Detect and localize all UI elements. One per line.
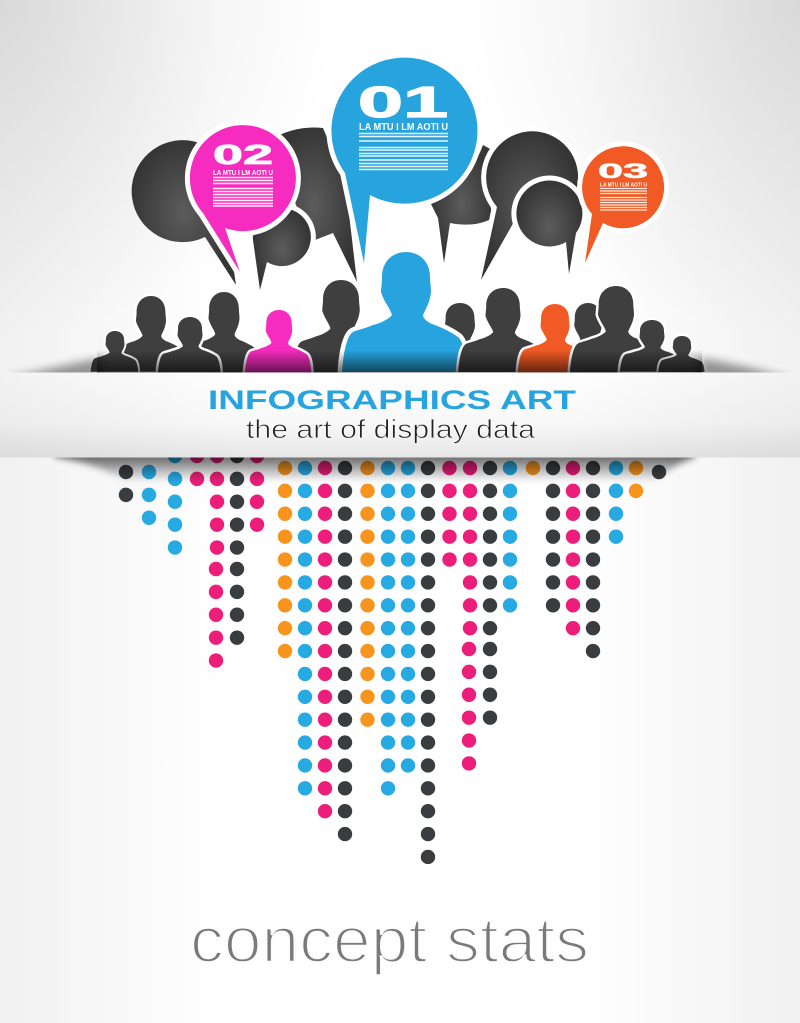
caption 02: LA MTU I LM AOTI U bbox=[213, 170, 273, 177]
person left 1 bbox=[91, 331, 138, 372]
banner bbox=[0, 372, 800, 458]
column 9 blue dots bbox=[298, 468, 312, 789]
column 23 dark dots bbox=[586, 468, 600, 652]
column 5 pink dots lower bbox=[209, 569, 223, 661]
column 4 pink dots bbox=[190, 456, 204, 480]
person left 6 bbox=[293, 280, 387, 372]
banner shadow above right bbox=[700, 358, 795, 380]
person right 1 bbox=[422, 303, 497, 372]
column 5 pink dots upper bbox=[210, 456, 224, 548]
banner end shading bbox=[0, 372, 800, 458]
text lines 03 bbox=[600, 188, 647, 210]
column 1 dark dots bbox=[119, 472, 133, 496]
column 18 dark dots lower bbox=[483, 649, 497, 718]
person right 5 bbox=[570, 286, 660, 372]
dark bubble upper right of magenta bbox=[270, 128, 357, 282]
column 2 blue dots bbox=[142, 472, 156, 518]
person right 7 bbox=[658, 336, 705, 372]
person left 3 bbox=[158, 317, 220, 372]
dark bubble left bbox=[132, 140, 236, 285]
column 17 pink dots upper bbox=[463, 468, 477, 629]
magenta bubble 02 bbox=[190, 125, 296, 272]
orange bubble 03 bbox=[582, 146, 664, 263]
column 25 orange dots bbox=[629, 468, 643, 491]
column 21 dark dots bbox=[546, 468, 560, 606]
shadow fade over audience bbox=[97, 350, 702, 373]
banner strip bbox=[0, 372, 800, 458]
dot matrix chart bbox=[126, 456, 659, 858]
orange bubble shape bbox=[582, 146, 664, 263]
person right 6 bbox=[620, 320, 682, 372]
column 13 blue dots bbox=[381, 468, 395, 789]
person right 2 bbox=[458, 288, 546, 372]
column 24 blue dots bbox=[609, 468, 623, 537]
column 17 pink dots lower bbox=[462, 649, 476, 764]
column 22 pink dots bbox=[566, 468, 580, 629]
column 10 pink dots bbox=[318, 468, 332, 812]
person left 2 bbox=[113, 296, 188, 372]
dark bubble large right bbox=[481, 131, 578, 280]
banner shadow below bbox=[55, 450, 695, 484]
dark bubble small right bbox=[516, 180, 582, 274]
speech bubbles dark group bbox=[132, 128, 582, 290]
number 01: 01 bbox=[358, 78, 448, 127]
caption 01: LA MTU I LM AOTI U bbox=[359, 122, 448, 133]
bottom heading: concept stats bbox=[190, 904, 589, 976]
column 12 orange dots bbox=[360, 468, 375, 720]
column 6 dark dots lower bbox=[230, 569, 244, 638]
column 16 pink dots bbox=[442, 468, 457, 560]
person magenta bbox=[245, 310, 311, 372]
number 02: 02 bbox=[213, 139, 273, 170]
column 8 orange dots bbox=[278, 468, 292, 652]
number 03: 03 bbox=[598, 160, 648, 183]
person orange bbox=[518, 304, 590, 372]
column 7 pink dots bbox=[250, 456, 264, 526]
column 15 dark dots bbox=[421, 468, 435, 858]
column 14 blue dots bbox=[401, 468, 415, 766]
background top-right vignette bbox=[460, 0, 800, 340]
background top-left vignette bbox=[0, 0, 340, 340]
text lines 02 bbox=[213, 178, 273, 206]
banner subtitle: the art of display data bbox=[246, 414, 536, 444]
blue bubble shape bbox=[331, 58, 477, 263]
caption 03: LA MTU I LM AOTI U bbox=[600, 182, 647, 188]
dark bubble small bbox=[253, 208, 311, 290]
person main blue bbox=[342, 252, 467, 372]
column 18 dark dots upper bbox=[483, 468, 497, 629]
banner title: INFOGRAPHICS ART bbox=[208, 385, 577, 415]
dark bubble left of orange side bbox=[431, 145, 493, 263]
text lines 01 bbox=[359, 134, 448, 170]
person left 4 bbox=[184, 292, 262, 372]
column 19 blue dots bbox=[503, 468, 517, 606]
column 20 orange dot bbox=[526, 461, 540, 476]
column 26 dark dot bbox=[652, 465, 666, 480]
column 3 blue dots bbox=[168, 456, 182, 548]
audience silhouettes bbox=[91, 252, 705, 372]
banner shadow above left bbox=[0, 358, 100, 380]
column 11 dark dots bbox=[338, 468, 352, 835]
column 6 dark dots upper bbox=[230, 456, 244, 548]
magenta bubble shape bbox=[190, 125, 296, 272]
blue bubble 01 bbox=[331, 58, 477, 263]
person right 4 bbox=[553, 303, 622, 372]
